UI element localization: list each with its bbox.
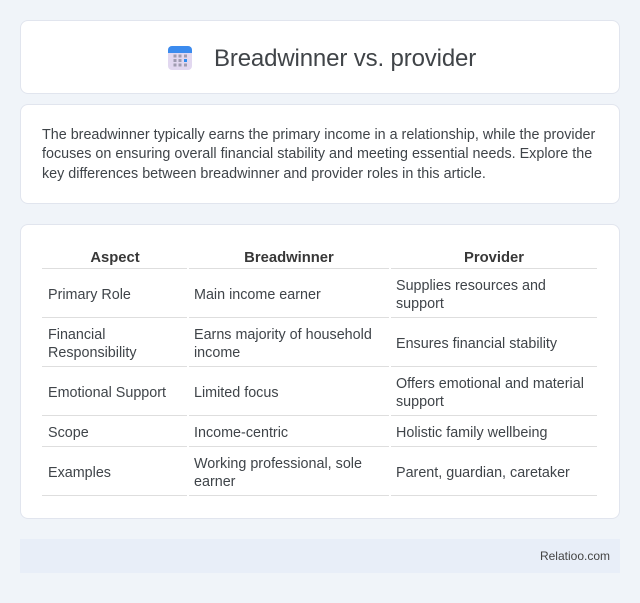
row: primary role: support [396, 296, 444, 312]
row: emotional support: Limited focus [194, 385, 279, 401]
row: primary role: Supplies resources and [396, 278, 546, 294]
row: financial responsibility [48, 327, 557, 361]
title: Breadwinner vs. provider [214, 45, 476, 72]
comparison table card [20, 224, 620, 519]
row: examples: earner [194, 474, 235, 490]
table header [90, 250, 524, 266]
row: emotional support: Offers emotional and material [396, 376, 584, 392]
row: scope: Scope [48, 425, 89, 441]
row: primary role [48, 278, 546, 312]
table header: Aspect [90, 250, 140, 266]
row: scope: Income-centric [194, 425, 288, 441]
row: emotional support [48, 376, 584, 410]
row: financial responsibility: Financial [48, 327, 105, 343]
footer credit: Relatioo.com [540, 549, 610, 563]
intro text [42, 127, 596, 182]
row: scope [48, 425, 547, 441]
row: financial responsibility: Responsibility [48, 345, 136, 361]
row: emotional support: support [396, 394, 444, 410]
table header: Breadwinner [244, 250, 334, 266]
row: financial responsibility: income [194, 345, 240, 361]
intro text: key differences between breadwinner and provider roles in this article. [42, 166, 486, 182]
row: examples: Working professional, sole [194, 456, 362, 472]
table header: Provider [464, 250, 524, 266]
row: primary role: Main income earner [194, 287, 321, 303]
row: scope: Holistic family wellbeing [396, 425, 547, 441]
row: financial responsibility: Ensures financial stability [396, 336, 557, 352]
row: examples [48, 456, 570, 490]
intro card [20, 104, 620, 204]
intro text: The breadwinner typically earns the primary income in a relationship, while the provider [42, 127, 595, 143]
row: financial responsibility: Earns majority of household [194, 327, 372, 343]
footer bar [20, 539, 620, 573]
row: examples: Parent, guardian, caretaker [396, 465, 570, 481]
title card [20, 20, 620, 94]
icon: calendar [168, 46, 192, 70]
row: examples: Examples [48, 465, 111, 481]
intro text: focuses on ensuring overall financial stability and meeting essential needs. Explore the [42, 146, 592, 162]
row: emotional support: Emotional Support [48, 385, 166, 401]
table [42, 250, 597, 496]
row: primary role: Primary Role [48, 287, 131, 303]
